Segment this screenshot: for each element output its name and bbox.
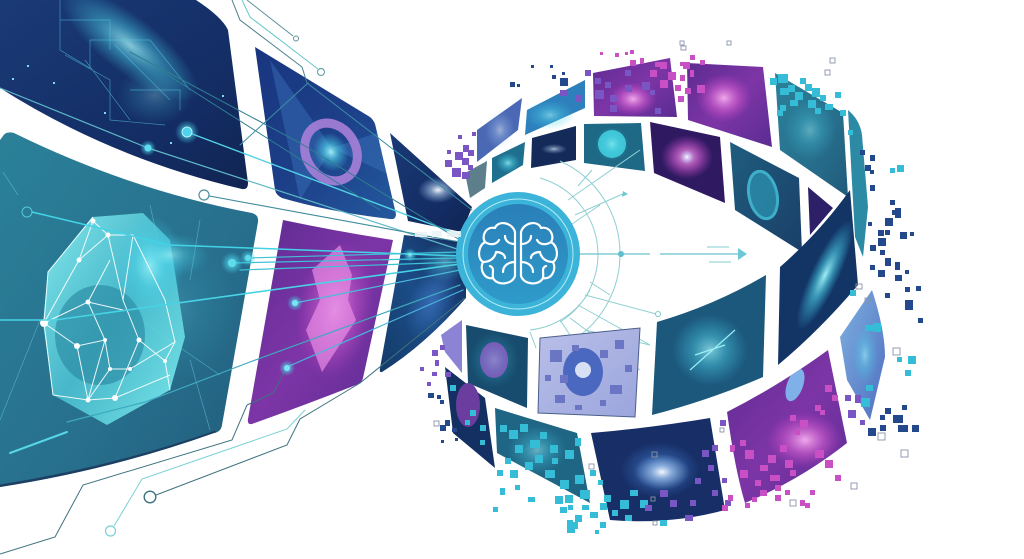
panel: top-left circuit screen [0,0,250,195]
trace: upper teal with terminal [242,0,324,76]
panel: loop purple c [593,58,677,117]
pixel particles: magenta [600,50,841,511]
panel: teal t [495,408,590,503]
trace: upper dark [232,0,307,83]
panel: inner purple k [650,122,725,203]
circuit traces [0,0,465,554]
panel: star screen [390,133,472,232]
panel: inner teal l [730,142,802,252]
pixel particles: violet [420,70,865,521]
panel: mandala screen [250,45,400,225]
panel: lavender pixel p [538,328,640,417]
trace: lower teal with terminal [106,410,305,536]
panel: inner purple m [808,187,833,235]
panel: purple pink v [725,348,850,506]
connection nodes [22,127,417,376]
panel: inner navy i [531,126,576,168]
icon: right hemisphere [521,223,557,283]
icon: polyhedral brain gem [40,213,210,425]
panel: inner grey g [465,161,487,198]
icon: brain hub [456,192,580,316]
panel: navy s [445,367,495,468]
pixel particles: outlined squares [434,41,908,525]
trace: upper with small terminal [247,0,298,41]
panel: blue leaf w [840,290,885,420]
loop panels: lower outer row [445,290,885,525]
panel: dark screen beside hub [380,235,466,372]
trace: lower dark [0,367,287,554]
connection lines into hub [0,52,472,453]
panel: lavender strip r [441,320,462,373]
icon: glowing node [175,120,199,144]
pixel particles: cyan [450,74,916,534]
panel: purple screen with pink crystal [245,218,395,428]
panel: inner teal h [492,142,525,183]
arrow: diagonal upper [622,191,628,197]
panel: loop blue a [477,98,522,162]
panel: dark teal o [652,275,766,415]
icon: left hemisphere [479,223,515,283]
panel: dark teal q [466,325,528,408]
panel: large dark blue screen n [778,190,858,365]
arrow: main horizontal [580,247,747,262]
trace: lower dark with terminal [144,298,465,503]
panel: loop teal e [775,73,848,197]
loop panels: upper outer row [477,58,868,257]
panel: loop thin edge f [848,110,868,257]
pixel particles: navy and blue [428,65,923,443]
loop panels: lower inner row [441,275,766,417]
panel: navy burst u [591,418,724,522]
loop panels: upper inner row [465,122,863,368]
panel: large teal screen with polyhedral brain [0,130,262,490]
panel: loop purple d [687,63,772,147]
top rim highlight on screens [415,231,461,237]
panel: inner teal j [584,123,645,171]
hub radial lines and arrow [530,150,747,370]
panel: loop teal b [525,80,585,135]
